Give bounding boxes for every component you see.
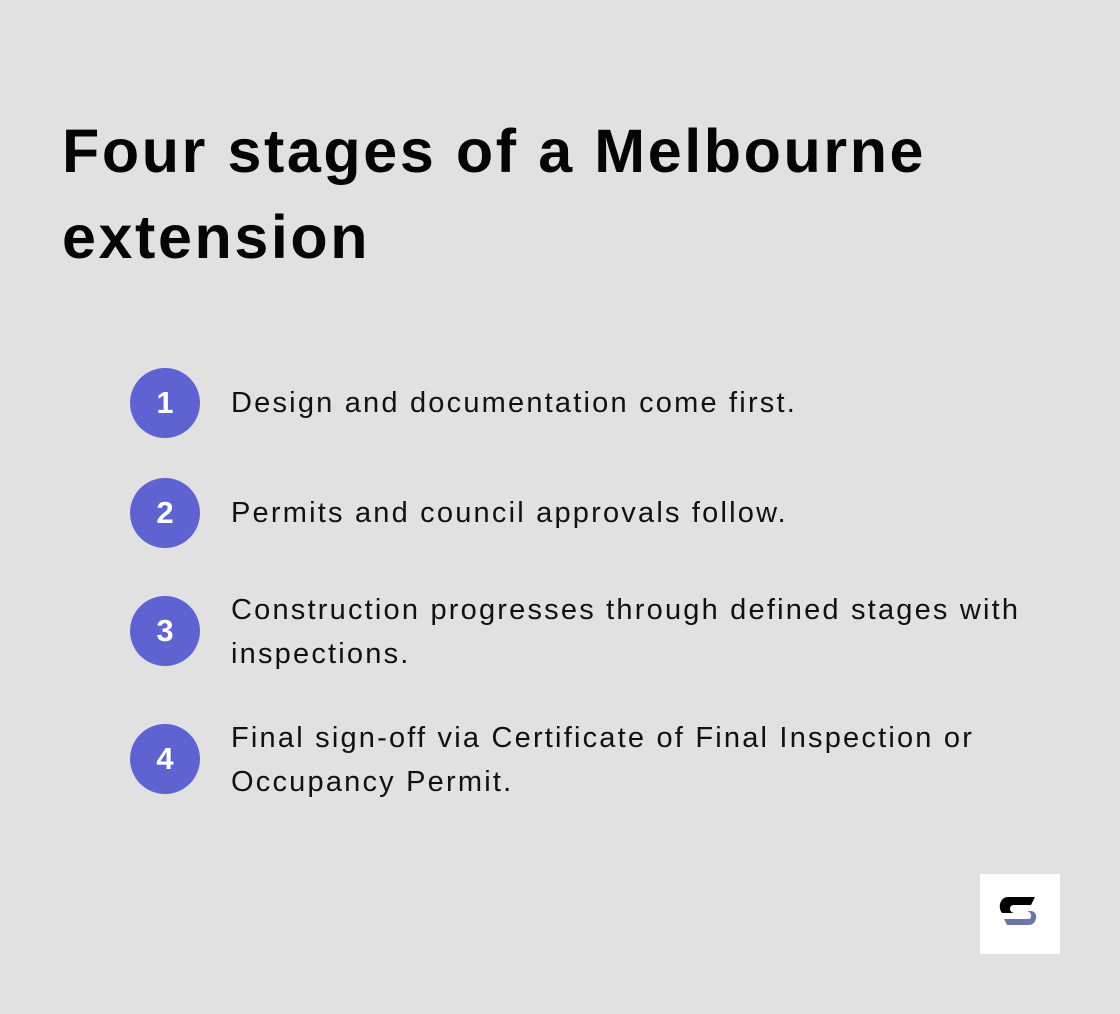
title: [62, 117, 926, 271]
badge 2: 2: [156, 495, 174, 530]
step 3: [130, 594, 1020, 670]
step 1: [130, 368, 797, 438]
text 2: Permits and council approvals follow.: [231, 497, 788, 529]
badge 1: 1: [156, 385, 174, 420]
badge 2: [130, 478, 200, 548]
title: Four stages of a Melbourne: [62, 117, 926, 185]
badge 3: [130, 596, 200, 666]
text 1: Design and documentation come first.: [231, 387, 797, 419]
step 2: [130, 478, 788, 548]
text 4: Final sign-off via Certificate of Final Inspection or: [231, 722, 974, 754]
badge 4: 4: [156, 741, 174, 776]
logo: [980, 874, 1060, 954]
text 3: Construction progresses through defined stages with: [231, 594, 1020, 626]
text 4: Occupancy Permit.: [231, 766, 513, 798]
badge 1: [130, 368, 200, 438]
badge 4: [130, 724, 200, 794]
text 3: [231, 594, 1020, 670]
text 4: [231, 722, 974, 798]
text 3: inspections.: [231, 638, 411, 670]
badge 3: 3: [156, 613, 174, 648]
title: extension: [62, 203, 370, 271]
step 4: [130, 722, 974, 798]
